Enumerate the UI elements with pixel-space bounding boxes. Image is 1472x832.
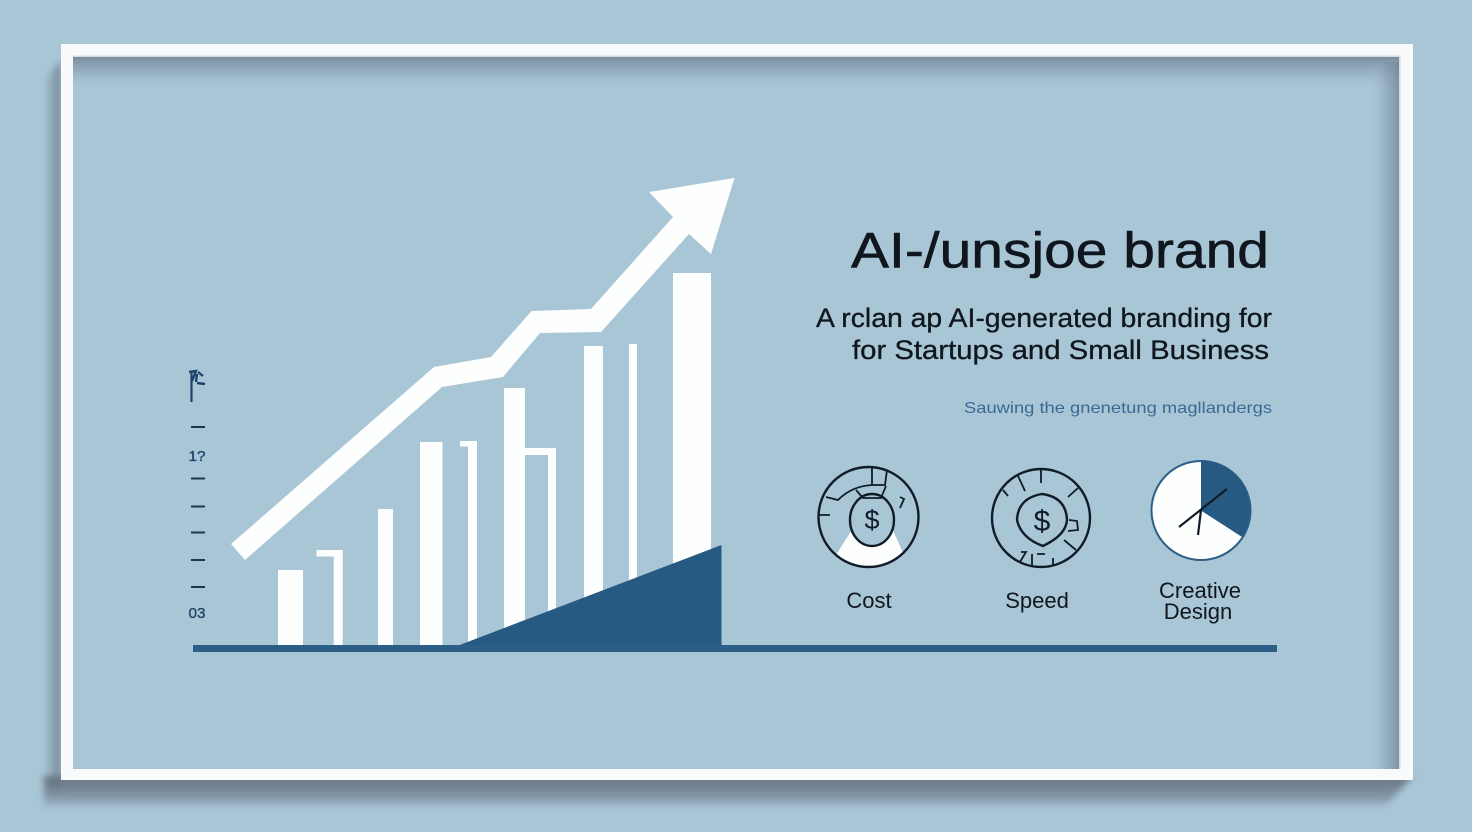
icon: creative pie — [1152, 460, 1250, 560]
icon: cost — [818, 467, 918, 567]
bar 5 hooked — [460, 441, 477, 646]
icon: cost: $ — [864, 505, 880, 535]
icon: speed: $ — [1034, 505, 1051, 538]
icon: speed — [992, 469, 1090, 567]
bar 4 — [420, 442, 442, 646]
title: AI-/unsjoe brand — [851, 222, 1269, 278]
axis label upper: 1? — [188, 448, 206, 465]
bar 8 — [629, 344, 637, 584]
rising arrow — [231, 178, 734, 560]
bar 2 hooked — [316, 550, 343, 646]
axis label lower: 03 — [188, 605, 206, 622]
axis ticks — [191, 426, 205, 588]
bar 6 hooked — [504, 388, 556, 630]
subtitle — [816, 303, 1272, 365]
blue triangle — [457, 545, 722, 646]
subtitle: for Startups and Small Business — [852, 335, 1269, 365]
bar 1 — [278, 570, 303, 646]
baseline — [193, 645, 1277, 652]
label: cost: Cost — [846, 588, 892, 613]
bar 7 — [584, 346, 603, 616]
subtitle: A rclan ap AI-generated branding for — [816, 303, 1272, 333]
label: creative design — [1159, 578, 1241, 624]
label: speed: Speed — [1005, 588, 1069, 613]
y axis — [188, 371, 206, 622]
bar chart — [278, 273, 711, 646]
label: creative design: Creative — [1159, 578, 1241, 603]
axis flag icon — [189, 371, 205, 402]
label: creative design: Design — [1164, 599, 1232, 624]
tagline: Sauwing the gnenetung magllandergs — [964, 400, 1272, 417]
bar 9 — [673, 273, 711, 573]
bar 3 — [378, 509, 393, 646]
